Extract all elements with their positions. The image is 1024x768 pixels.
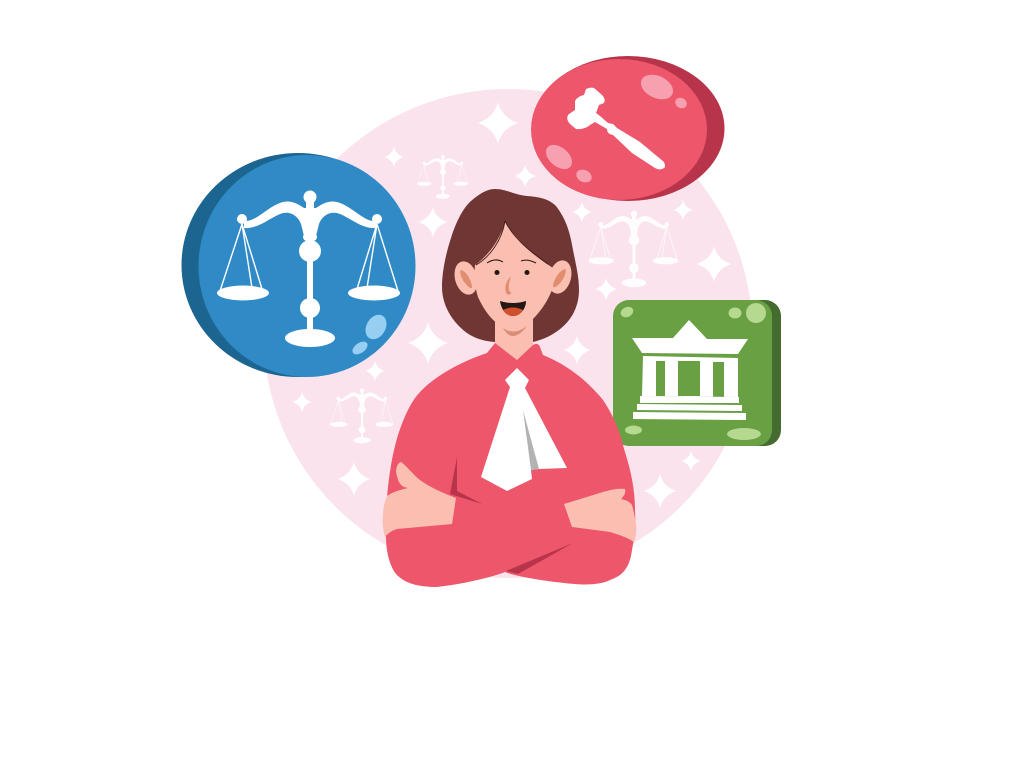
- hair parting strands: [476, 221, 548, 265]
- sleeve crease: left: [450, 457, 482, 504]
- faint scales: [329, 155, 678, 443]
- nose: [505, 276, 512, 295]
- icon: courthouse badge: [613, 300, 781, 446]
- jabot tie: [481, 368, 567, 491]
- eyebrows: [487, 260, 536, 263]
- face: [475, 222, 553, 331]
- left hand: [383, 462, 456, 537]
- mouth: [500, 301, 526, 316]
- chin shadow: [503, 326, 527, 336]
- eyes: [494, 270, 500, 275]
- sparkles: [292, 102, 731, 508]
- background circle: [264, 89, 752, 578]
- shirt: [385, 343, 635, 587]
- neck: [495, 310, 533, 362]
- icon: gavel badge: [531, 56, 724, 201]
- sleeve crease: bottom: [506, 543, 573, 574]
- icon: scales of justice badge: [182, 153, 416, 377]
- right hand: [564, 489, 636, 542]
- hair: [442, 189, 579, 342]
- character: woman lawyer: [383, 189, 636, 587]
- ear: right: [545, 258, 575, 296]
- ear: left: [451, 259, 481, 297]
